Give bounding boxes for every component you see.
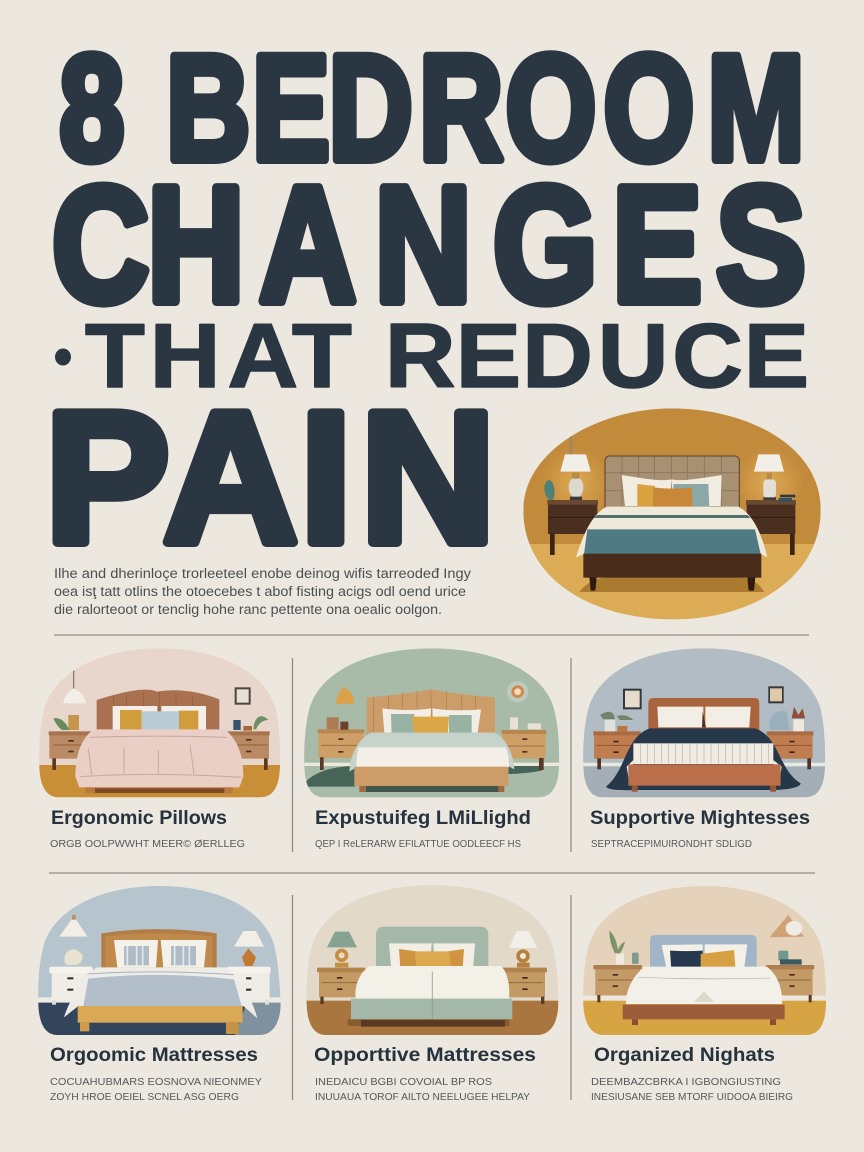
illustration: blue-grey bedroom (583, 648, 826, 798)
card title: Organized Nighats (594, 1044, 775, 1066)
card title: Ergonomic Pillows (51, 807, 227, 829)
illustration: beige bedroom (583, 886, 826, 1035)
card caption: INUUAUA TOROF AILTO NEELUGEE HELPAY (315, 1091, 530, 1103)
card caption: ZOYH HROE OEIEL SCNEL ASG OERG (50, 1091, 239, 1103)
illustration: pale blue bedroom (38, 886, 281, 1035)
hero bedroom illustration (523, 408, 821, 620)
title: THAT REDUCE (85, 305, 809, 407)
illustration: pink bedroom (39, 648, 280, 798)
panel: organized nights (583, 886, 826, 1100)
illustration: sage bedroom (304, 648, 560, 798)
intro paragraph: Ilhe and dherinloçe trorleeteel enobe deinog wifis tarreodeđ Ingy (54, 566, 471, 581)
card caption: QEP I ReLERARW EFILATTUE OODLEECF HS (315, 838, 521, 850)
title: PAIN (45, 373, 496, 582)
intro paragraph (54, 566, 471, 617)
card title: Orgoomic Mattresses (50, 1044, 258, 1066)
card caption (315, 1076, 530, 1103)
card title: Opporttive Mattresses (314, 1044, 536, 1066)
card caption: ORGB OOLPWWHT MEER© ØERLLEG (50, 838, 245, 850)
card caption: DEEMBAZCBRKA I IGBONGIUSTING (591, 1076, 781, 1088)
intro paragraph: die ralorteoot or tenclig hohe ranc pettente ona oealic oolgon. (54, 602, 442, 617)
card caption: INESIUSANE SEB MTORF UIDOOA BIEIRG (591, 1091, 793, 1103)
panel: ergonomic mattresses (38, 886, 281, 1100)
card title: Supportive Mightesses (590, 807, 810, 829)
panel: supportive mattresses (583, 648, 826, 847)
card caption (50, 1076, 262, 1103)
title: CHANGES (52, 152, 806, 336)
panel: opportive mattresses (306, 885, 558, 1100)
panel: exposure lighting (295, 640, 565, 850)
intro paragraph: oea isţ tatt otlins the otoecebes t abof fisting acigs odl oend urice (54, 584, 466, 599)
panel: ergonomic pillows (39, 648, 280, 848)
title (45, 23, 809, 582)
card caption (591, 1076, 793, 1103)
card caption: SEPTRACEPIMUIRONDHT SDLIGD (591, 838, 752, 850)
illustration: sage headboard bedroom (306, 885, 558, 1035)
card caption: COCUAHUBMARS EOSNOVA NIEONMEY (50, 1076, 262, 1088)
title: 8 BEDROOM (59, 23, 805, 192)
card title: Expustuifeg LMiLlighd (315, 807, 531, 829)
card caption: INEDAICU BGBI COVOIAL BP ROS (315, 1076, 492, 1088)
